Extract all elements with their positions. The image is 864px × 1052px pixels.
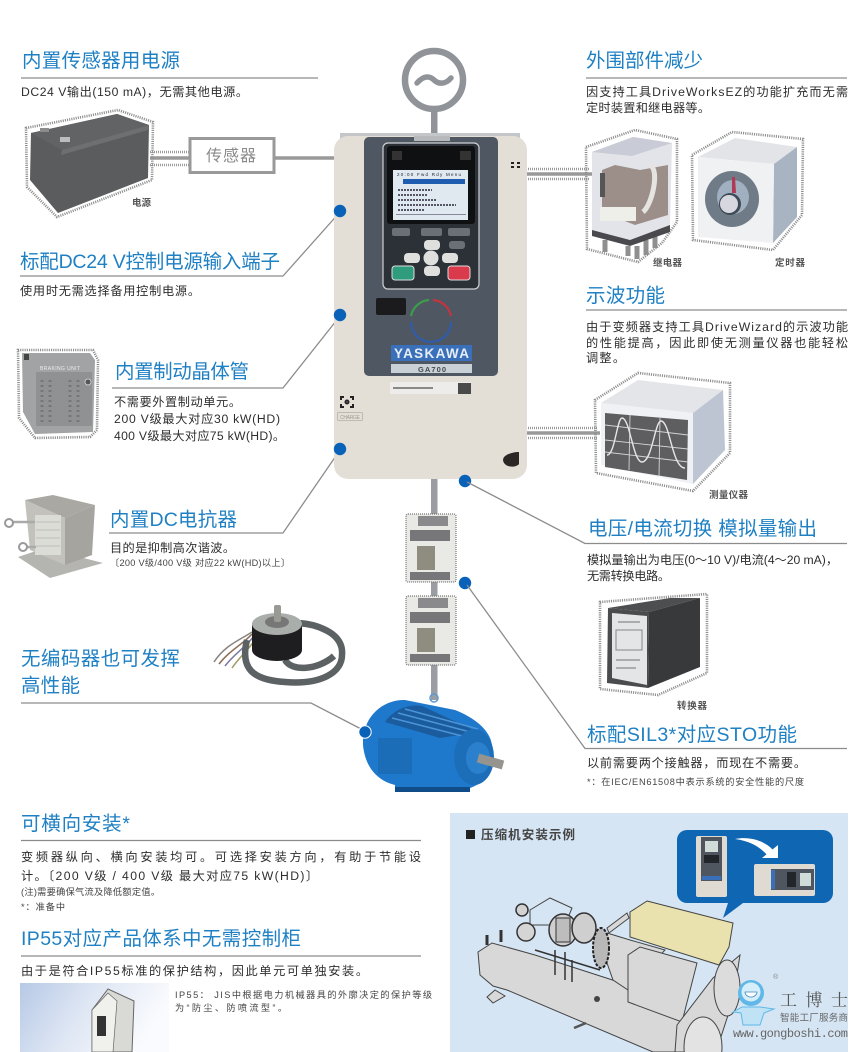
box: sensor: [190, 138, 274, 172]
heading: SIL3 STO function: 标配SIL3*对应STO功能: [587, 724, 797, 746]
speaker dots: [511, 162, 520, 168]
charge lamp: CHARGE: [340, 415, 361, 421]
watermark: gongboshi: 工博士: [780, 986, 848, 1011]
mini inverter horizontal: [754, 864, 815, 896]
text: control power description: 使用时无需选择备用控制电源。: [20, 283, 200, 298]
heading: voltage/current analog output: 电压/电流切换 模拟量输出: [588, 518, 817, 540]
USB port cover: [376, 298, 406, 315]
compressor drawing: [478, 898, 740, 1052]
watermark: gongboshi: [733, 973, 848, 1041]
callout dots: [334, 205, 471, 738]
charge lamp: [338, 412, 362, 421]
connector wires to sensor, power and peripherals: [150, 152, 600, 700]
image: encoder: [214, 605, 342, 682]
watermark: gongboshi: ®: [773, 973, 779, 981]
text: oscilloscope description: 调整。: [586, 350, 625, 365]
callout: horizontal vs vertical mounting: [677, 830, 833, 918]
icon: approvals mark: [341, 397, 353, 407]
arrow: rotate: [735, 838, 778, 858]
heading: high performance without encoder: 无编码器也可发挥: [21, 648, 180, 670]
contactor top: [406, 514, 456, 582]
YASKAWA logo: YASKAWA: [394, 346, 469, 361]
heading: high performance without encoder: 高性能: [21, 675, 80, 697]
end plates: [675, 955, 740, 1052]
highlighted inverter location: [630, 901, 733, 965]
text: horizontal mounting description: 变频器纵向、横向安装均可。可选择安装方向，有助于节能设: [21, 849, 421, 864]
caption: relay: 继电器: [653, 257, 682, 269]
image: blue motor: [363, 694, 503, 792]
heading: high performance without encoder: [21, 648, 180, 697]
text: analog output description: 无需转换电路。: [587, 568, 670, 583]
heading: horizontal mounting: 可横向安装*: [21, 813, 130, 835]
heading: IP55: IP55对应产品体系中无需控制柜: [21, 928, 301, 950]
status ring: [411, 300, 451, 342]
icon: AC power symbol: [405, 51, 463, 136]
image: timer: [692, 132, 805, 269]
compressor parts: [530, 898, 572, 925]
box: sensor: 传感器: [206, 147, 256, 165]
text: analog output description: [587, 552, 838, 583]
keypad: [383, 143, 479, 289]
notes: horizontal mounting: [21, 886, 160, 912]
panel heading: 压缩机安装示例: [481, 827, 575, 842]
mounting hole: [503, 452, 519, 467]
heading: built-in DC reactor: 内置DC电抗器: [110, 509, 237, 531]
shell: [478, 943, 700, 1052]
model plate GA700: GA700: [418, 365, 446, 374]
panel: compressor installation example: [450, 813, 848, 1052]
text: IP55 definition: 为“防尘、防喷流型”。: [175, 1002, 287, 1013]
LCD screen: [393, 170, 468, 220]
heading: built-in braking transistor: 内置制动晶体管: [115, 361, 249, 383]
keypad buttons: [392, 228, 470, 280]
LCD screen: 20:00 Fwd Rdy Menu: [397, 172, 461, 177]
text: braking transistor description: 不需要外置制动单元。: [114, 395, 241, 409]
image: signal converter: [600, 594, 707, 712]
heading: oscilloscope function: 示波功能: [586, 285, 665, 307]
image: battery power source: [26, 110, 153, 217]
text: sensor power description: DC24 V输出(150 mA)，无需其他电源。: [21, 84, 248, 99]
watermark: gongboshi: 智能工厂服务商: [780, 1012, 848, 1024]
text: peripherals description: 因支持工具DriveWorksEZ的功能扩充而无需: [586, 84, 848, 99]
contactor bottom: [406, 596, 456, 665]
image: measuring instrument: [595, 373, 748, 501]
text: horizontal mounting description: [21, 849, 421, 883]
text: analog output description: 模拟量输出为电压(0～10 V)/电流(4～20 mA)，: [587, 552, 838, 567]
model plate GA700: [391, 364, 472, 374]
dark front panel: [364, 137, 498, 376]
text: oscilloscope description: 由于变频器支持工具DriveWizard的示波功能: [586, 319, 848, 334]
text: oscilloscope description: 的性能提高，因此即使无测量仪器也能轻松: [586, 335, 848, 350]
text: braking transistor description: [114, 395, 285, 443]
note: SIL definition: *：在IEC/EN61508中表示系统的安全性能的尺度: [587, 776, 804, 787]
mini inverter vertical: [696, 836, 727, 897]
text: IP55 definition: [175, 989, 432, 1013]
text: peripherals description: [586, 84, 848, 115]
text: IP55 description: 由于是符合IP55标准的保护结构，因此单元可单独安装。: [21, 963, 368, 978]
heading: built-in sensor power: 内置传感器用电源: [22, 50, 180, 72]
enclosure: [334, 136, 527, 479]
text: DC reactor description: 目的是抑制高次谐波。: [110, 540, 235, 555]
text: braking transistor description: 200 V级最大对应30 kW(HD): [114, 411, 280, 426]
image: braking unit: [18, 350, 98, 438]
heading: fewer peripherals: 外围部件减少: [586, 50, 703, 72]
text: IP55 definition: IP55： JIS中根据电力机械器具的外廓决定的保护等级: [175, 989, 432, 1000]
text: DC reactor description: 〔200 V级/400 V级 对应22 kW(HD)以上〕: [110, 557, 290, 568]
caption: converter: 转换器: [677, 700, 707, 712]
caption: measuring instrument: 测量仪器: [709, 489, 748, 501]
notes: horizontal mounting: (注)需要确保气流及降低额定值。: [21, 886, 160, 897]
image: braking unit: BRAKING UNIT: [40, 366, 80, 372]
control box: [628, 947, 697, 1022]
caption: power source: 电源: [132, 197, 151, 209]
text: horizontal mounting description: 计。〔200 V级 / 400 V级 最大对应75 kW(HD)〕: [21, 868, 318, 883]
text: peripherals description: 定时装置和继电器等。: [586, 100, 710, 115]
image: relay: [586, 130, 682, 269]
elbow pipe: [607, 933, 665, 990]
text: STO description: 以前需要两个接触器，而现在不需要。: [587, 755, 806, 770]
watermark: gongboshi: www.gongboshi.com: [733, 1027, 848, 1041]
text: braking transistor description: 400 V级最大对应75 kW(HD)。: [114, 428, 285, 443]
image: DC reactor: [5, 495, 103, 578]
caption: timer: 定时器: [775, 257, 805, 269]
text: oscilloscope description: [586, 319, 848, 365]
image: IP55 wall-mounted cabinet: [20, 983, 169, 1052]
drive unit GA700: [334, 133, 527, 479]
model label and QR code: [390, 382, 471, 394]
heading: DC24V control power terminal: 标配DC24 V控制电源输入端子: [20, 251, 280, 273]
notes: horizontal mounting: *：准备中: [21, 901, 65, 912]
text: DC reactor description: [110, 540, 290, 568]
